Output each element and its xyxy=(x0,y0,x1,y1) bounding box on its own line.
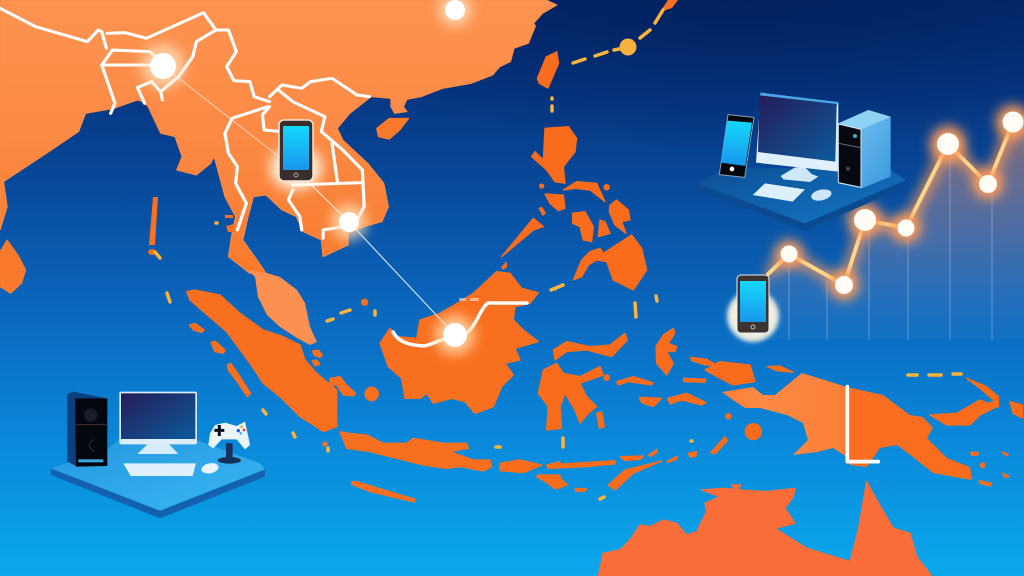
Andaman islands and Gulf specks xyxy=(148,0,678,255)
mainland Asia xyxy=(0,0,557,273)
hub node: Bangladesh xyxy=(141,44,185,88)
Philippines xyxy=(502,127,647,290)
Malaysia label marks on Borneo xyxy=(459,298,479,301)
chart point glows xyxy=(775,105,1024,300)
chart: growth line xyxy=(767,105,1024,340)
Sulawesi xyxy=(538,363,603,430)
gamepad xyxy=(208,422,250,464)
small islands west xyxy=(189,299,560,502)
New Guinea border xyxy=(847,387,878,462)
Australia xyxy=(598,482,932,576)
route waypoint dot xyxy=(620,38,636,56)
chart points xyxy=(780,112,1024,294)
Borneo border line xyxy=(393,303,527,346)
monitor xyxy=(119,392,197,454)
panel: top-right desktop and phone platform xyxy=(697,93,906,231)
mouse xyxy=(200,462,219,475)
hub node: Borneo xyxy=(435,315,475,355)
Java and Lesser Sunda west xyxy=(340,432,492,471)
panel: bottom-left desktop and gamepad platform xyxy=(51,392,265,518)
Malay peninsula xyxy=(248,270,317,345)
connection lines between hubs xyxy=(163,66,455,335)
country borders xyxy=(0,8,369,238)
dashed sea routes and yellow islets xyxy=(155,10,961,499)
Flores and Timor xyxy=(500,460,662,491)
hub node: Cambodia xyxy=(331,204,367,240)
Sumatra, Java, Borneo and nearby islands xyxy=(187,272,560,502)
Maluku islands xyxy=(656,328,677,375)
keyboard xyxy=(123,463,196,476)
keyboard xyxy=(753,183,805,202)
chart area under line xyxy=(767,115,1024,340)
eastern Indonesia, Philippines and New Guinea xyxy=(500,127,1023,576)
Sri Lanka, Hainan and Taiwan xyxy=(0,52,559,293)
icon: phone on mainland xyxy=(279,120,313,181)
hub node: north China xyxy=(439,0,471,26)
New Britain and Bismarck islands xyxy=(930,378,1023,486)
phone xyxy=(719,115,754,177)
chart line xyxy=(767,122,1013,285)
glow under map phone xyxy=(270,146,322,190)
monitor xyxy=(756,93,838,182)
chart drop lines xyxy=(789,150,992,340)
chart line glow xyxy=(767,122,1013,285)
tower xyxy=(67,392,107,467)
tower xyxy=(838,110,891,188)
platform xyxy=(697,180,906,231)
platform xyxy=(51,468,265,518)
mouse xyxy=(810,188,833,202)
Sumatra xyxy=(187,290,337,432)
New Guinea xyxy=(722,373,972,480)
icon: glowing phone by chart xyxy=(727,275,779,342)
Borneo xyxy=(380,272,538,413)
